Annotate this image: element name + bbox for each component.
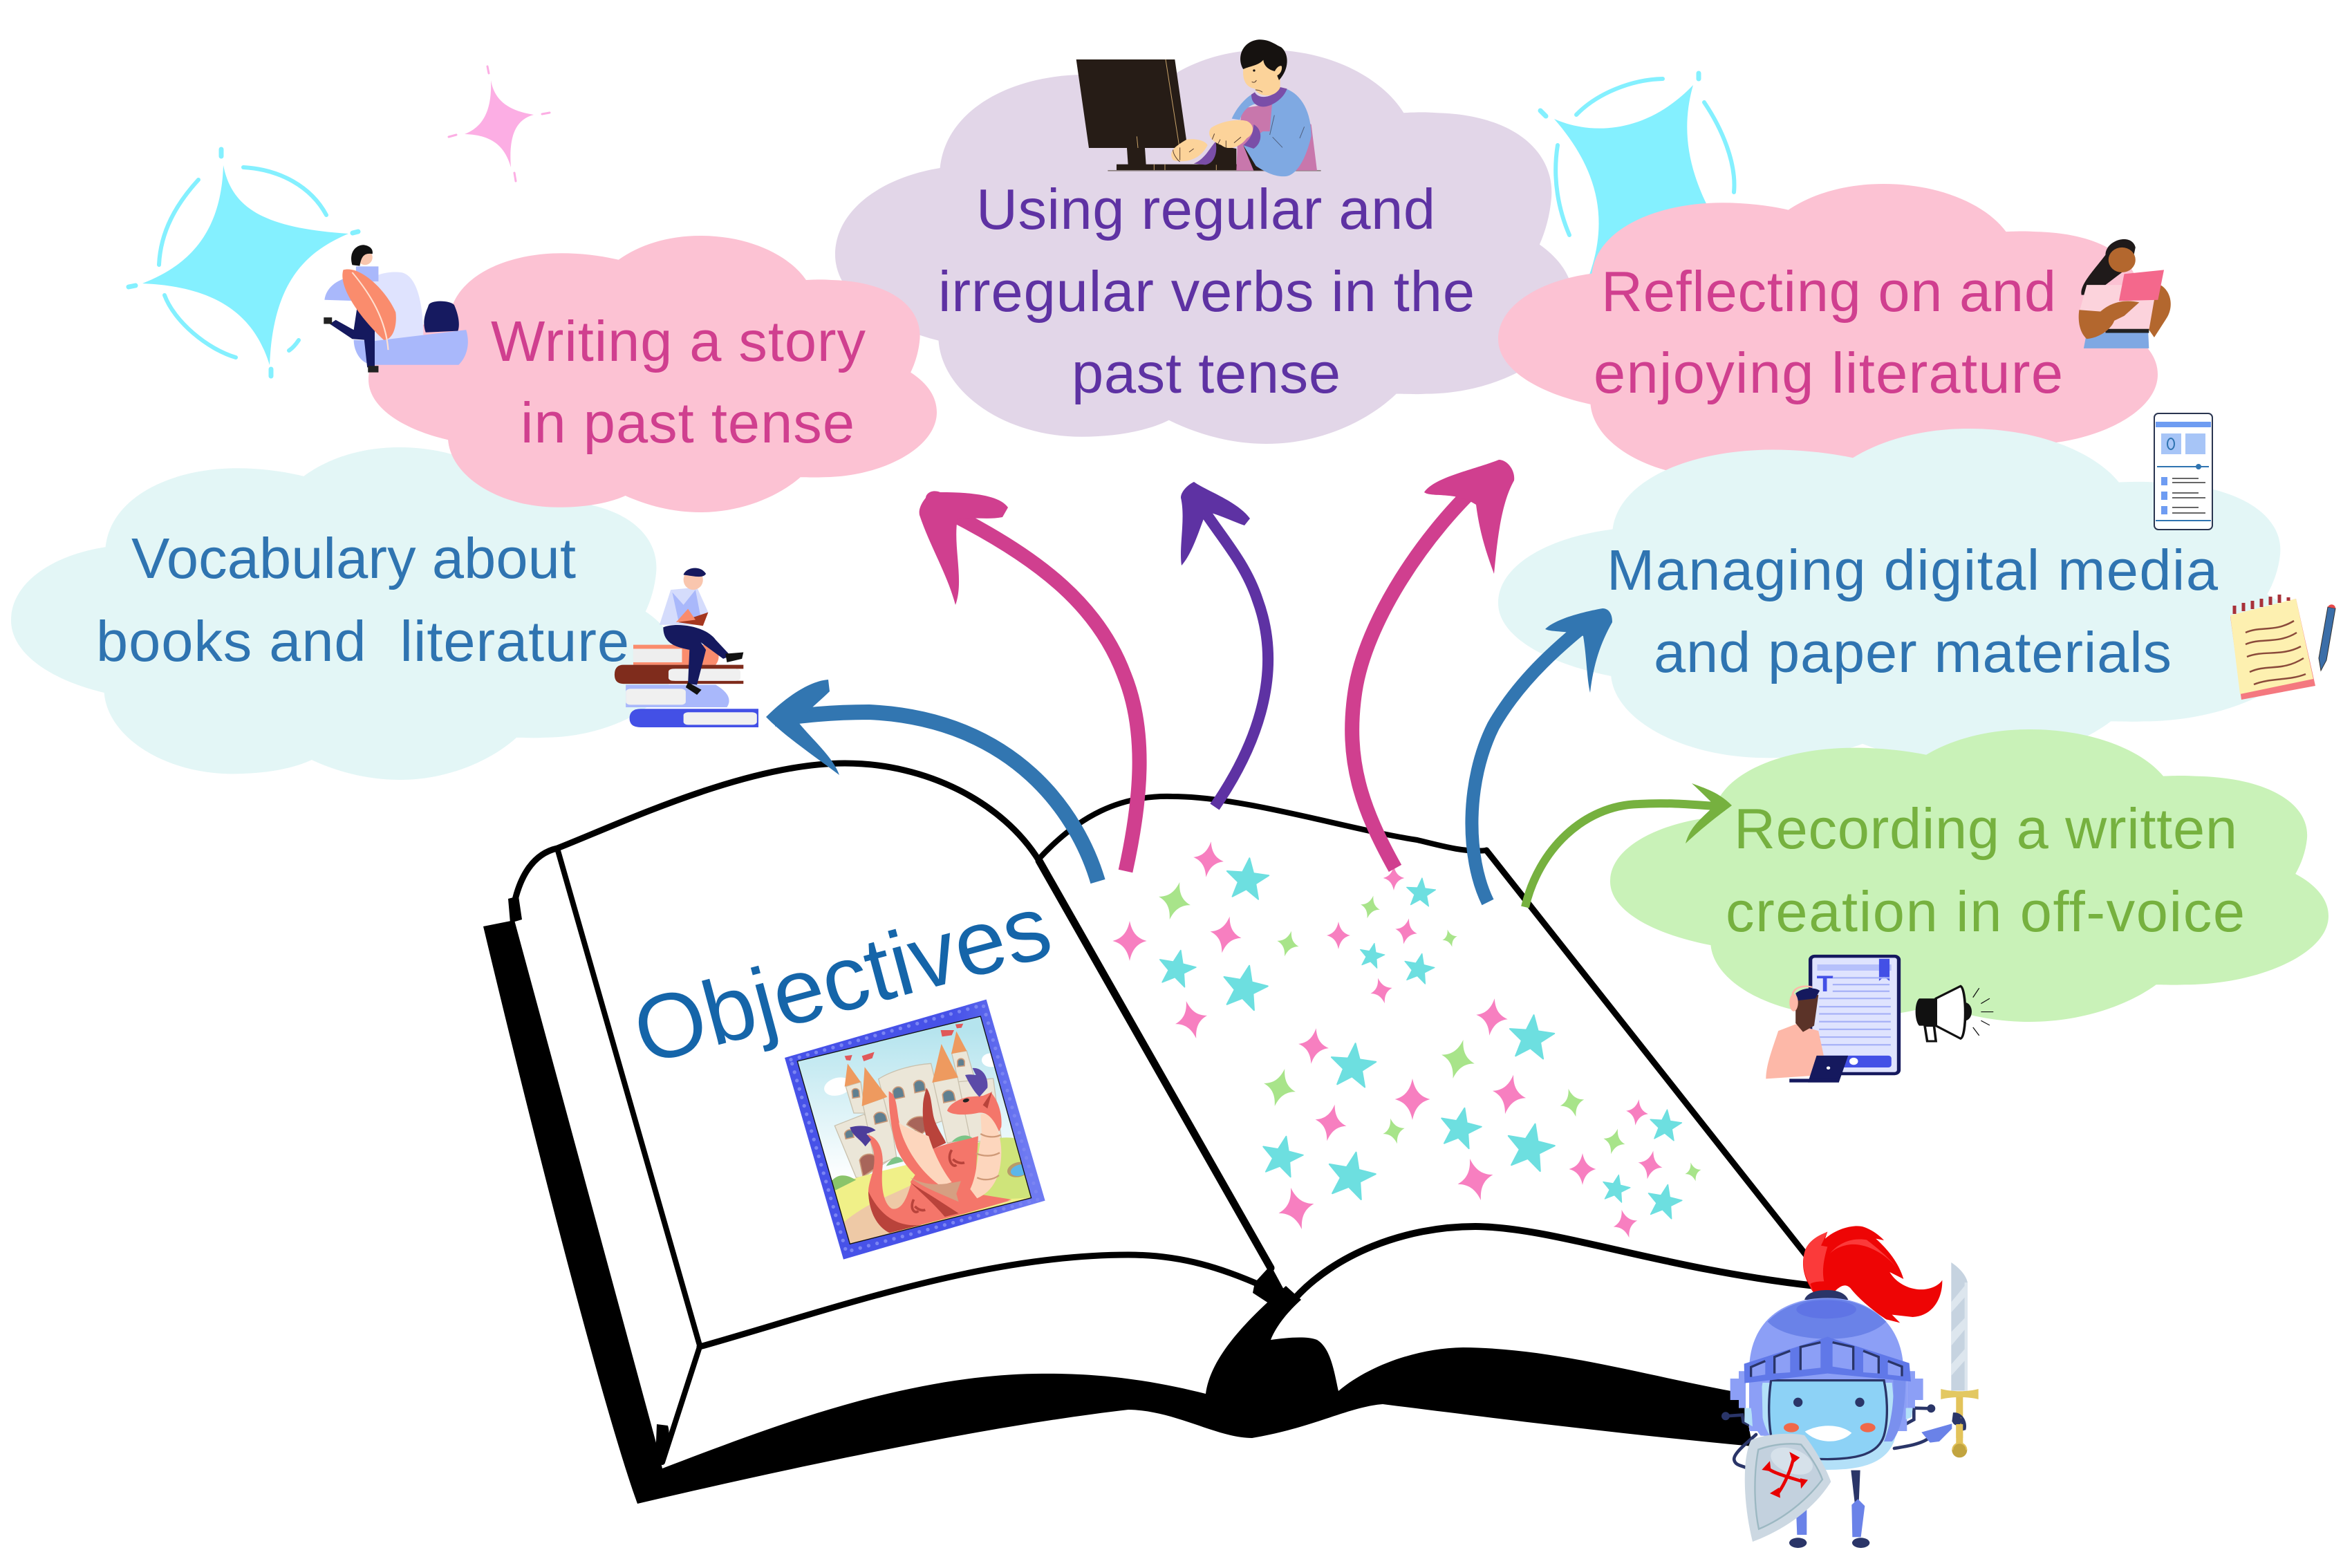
icon: audio book tablet with narrator — [1766, 956, 1898, 1083]
text: managing objective: and paper materials — [1654, 620, 2172, 684]
icon: smartphone — [2154, 413, 2212, 530]
arrow: pink to reflecting — [1352, 460, 1514, 868]
hand — [1921, 1412, 1966, 1443]
text: vocabulary objective — [96, 526, 629, 673]
arrow: blue to vocabulary — [766, 680, 1098, 881]
text: managing objective — [1607, 538, 2219, 684]
plume — [1803, 1226, 1942, 1323]
text: recording objective: creation in off-voice — [1726, 879, 2245, 944]
arrow: blue to managing — [1472, 608, 1612, 902]
cloud: pink right — [1498, 184, 2158, 483]
sparkle: large cyan left — [129, 149, 358, 376]
sparkle: small pink — [449, 66, 550, 181]
ground — [834, 1165, 1029, 1238]
legs — [1789, 1471, 1869, 1548]
arrow: purple to verbs — [1181, 482, 1268, 807]
arrow: green to recording — [1525, 783, 1732, 907]
cloud: lavender — [835, 50, 1574, 444]
text: writing objective: in past tense — [521, 391, 855, 455]
text: writing objective — [491, 309, 866, 455]
helmet and face — [1730, 1290, 1923, 1470]
text: writing objective: Writing a story — [491, 309, 866, 373]
text: recording objective: Recording a written — [1734, 796, 2237, 861]
text: vocabulary objective: books and literature — [96, 609, 629, 673]
text: recording objective — [1726, 796, 2245, 944]
icon: man at computer — [1076, 39, 1321, 176]
sparkle: large cyan right — [1540, 73, 1734, 290]
cloud: pale blue left — [11, 447, 676, 780]
text: vocabulary objective: Vocabulary about — [131, 526, 576, 590]
text: verbs objective: past tense — [1072, 341, 1341, 405]
icon: audio book tablet with narrator: T — [1817, 971, 1833, 996]
stars and sparkles on the book page — [1112, 839, 1704, 1241]
text: reflecting objective — [1594, 259, 2063, 405]
arrow: pink to writing — [920, 491, 1139, 871]
character: knight mascot — [1723, 1226, 1979, 1548]
dragon — [850, 1068, 1011, 1233]
cloud: pink left — [368, 236, 937, 512]
title: Objectives: Objectives — [623, 875, 1061, 1083]
castle — [834, 1024, 1001, 1177]
icon: notepad and pencil — [2230, 595, 2335, 700]
icon: megaphone — [1916, 986, 1993, 1041]
text: managing objective: Managing digital media — [1607, 538, 2219, 602]
icon: person reading on books — [615, 568, 758, 727]
arms — [1723, 1406, 1934, 1468]
picture: dragon and castle — [785, 1000, 1045, 1260]
cloud: green — [1610, 729, 2328, 1022]
cloud: pale blue right — [1498, 429, 2304, 764]
sword — [1941, 1262, 1979, 1457]
text: verbs objective: Using regular and — [976, 177, 1435, 241]
icon: writer with feather — [324, 245, 468, 373]
open book — [483, 763, 1816, 1504]
text: reflecting objective: enjoying literature — [1594, 341, 2063, 405]
text: reflecting objective: Reflecting on and — [1601, 259, 2056, 324]
shield — [1745, 1434, 1831, 1542]
text: verbs objective: irregular verbs in the — [938, 259, 1475, 324]
text: verbs objective — [938, 177, 1475, 405]
icon: girl with tablet — [2079, 239, 2171, 348]
